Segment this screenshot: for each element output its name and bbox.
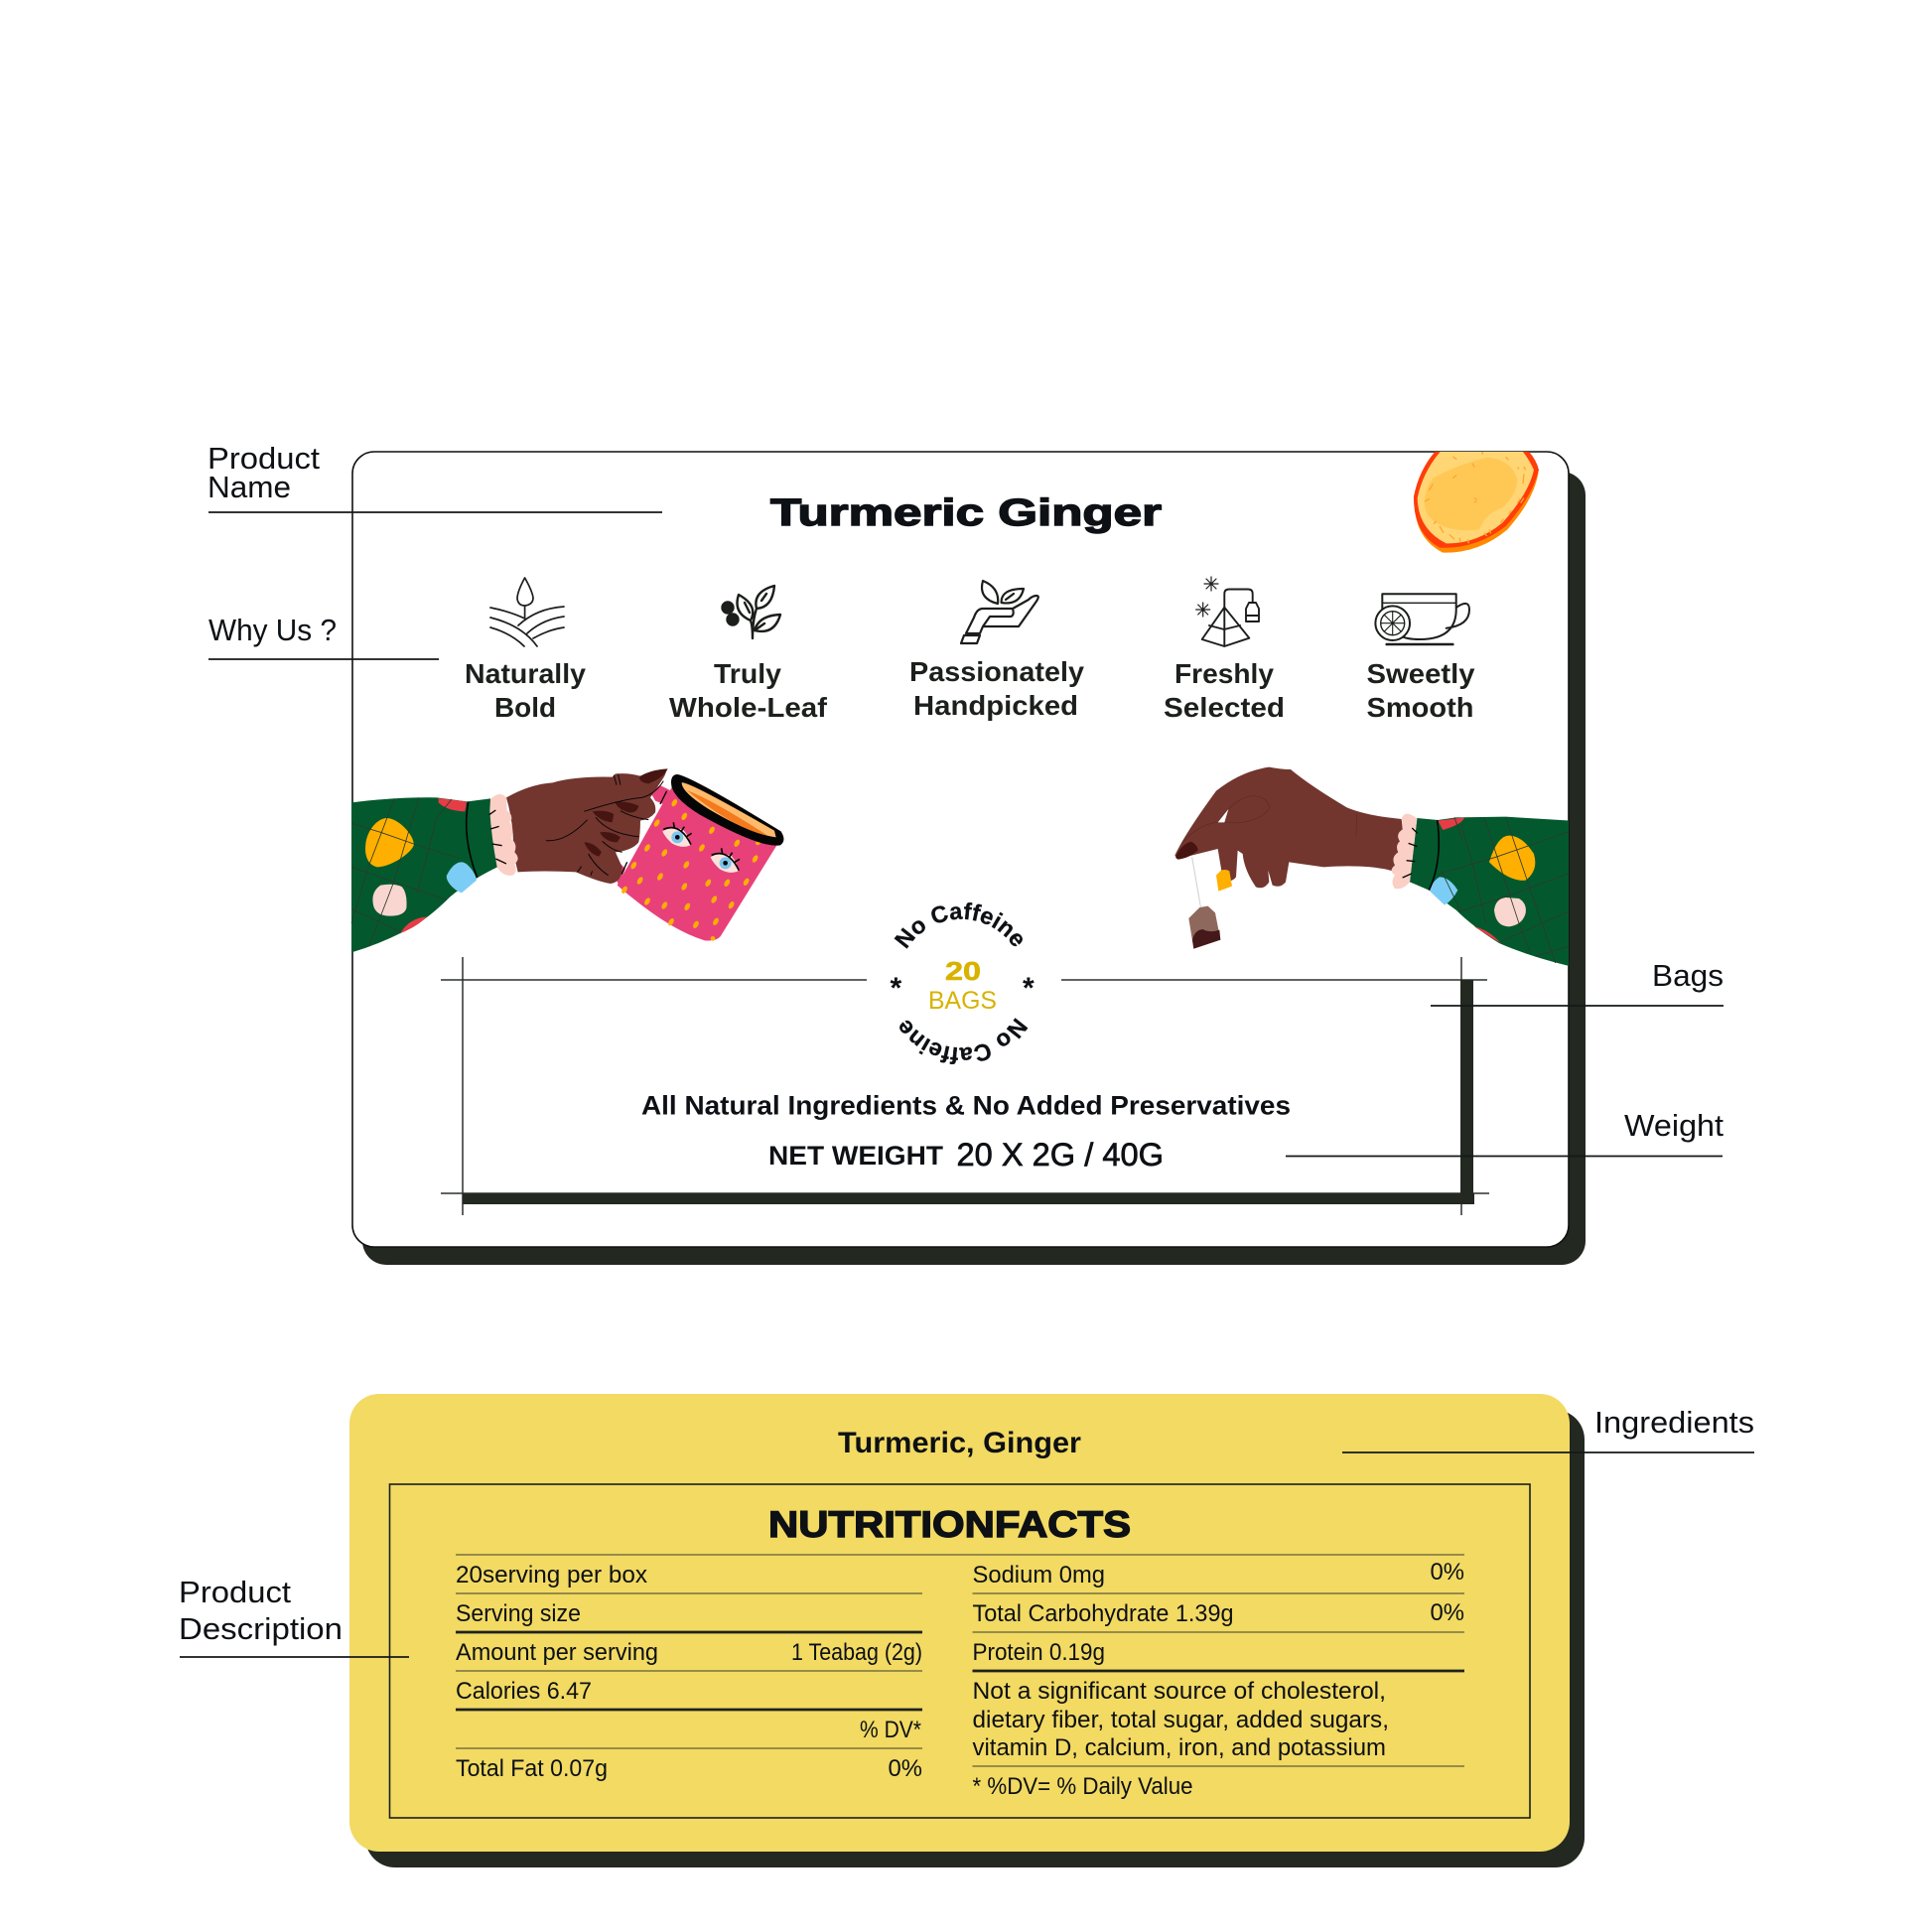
no caffeine badge: BAGS <box>928 987 997 1015</box>
left nutrition column <box>456 1562 922 1782</box>
label: passionately handpicked <box>909 656 1084 721</box>
nutrition card body <box>349 1394 1570 1852</box>
hand <box>1174 767 1403 888</box>
nutrition facts heading: NUTRITIONFACTS <box>768 1504 1131 1545</box>
label: truly whole-leaf: Truly <box>714 658 781 689</box>
left nutrition column: 20serving per box <box>456 1562 647 1588</box>
left nutrition column: Serving size <box>456 1600 581 1627</box>
label: sweetly smooth <box>1366 658 1475 723</box>
title: Turmeric Ginger <box>770 492 1162 534</box>
no caffeine badge <box>890 902 1035 1064</box>
mug handle <box>608 785 670 886</box>
label: passionately handpicked: Passionately <box>909 656 1084 687</box>
callout: bags: Bags <box>1652 958 1724 993</box>
callout: ingredients: Ingredients <box>1594 1405 1754 1440</box>
no caffeine badge: No Caffeine <box>899 1018 1029 1064</box>
tag <box>1216 870 1232 892</box>
cuff frill <box>489 794 518 876</box>
label: truly whole-leaf: Whole-Leaf <box>669 692 828 723</box>
ingredients heading: Turmeric, Ginger <box>838 1427 1081 1459</box>
label: truly whole-leaf <box>669 658 828 723</box>
table rules <box>456 1555 1464 1766</box>
left nutrition column: % DV* <box>860 1717 921 1743</box>
icon: orange slice <box>1414 447 1539 553</box>
label: sweetly smooth: Sweetly <box>1366 658 1475 689</box>
card body <box>352 452 1569 1247</box>
icon: passionately handpicked <box>961 581 1038 643</box>
net weight <box>768 1137 1164 1173</box>
callout: product name <box>207 441 662 512</box>
callout: product name: Product <box>207 441 320 476</box>
right nutrition column: vitamin D, calcium, iron, and potassium <box>973 1734 1386 1761</box>
right nutrition column: 0% <box>1430 1559 1464 1586</box>
panel: front label card <box>351 451 1586 1265</box>
net weight: 20 X 2G / 40G <box>957 1137 1164 1173</box>
mug body <box>618 784 777 940</box>
illustration: right arm with tea bag <box>1174 767 1571 966</box>
claim text: All Natural Ingredients & No Added Preservatives <box>641 1090 1291 1120</box>
label: freshly selected: Selected <box>1164 692 1285 723</box>
label: naturally bold: Naturally <box>465 658 586 689</box>
callout: product description: Description <box>179 1611 343 1646</box>
illustration: left arm with mug <box>351 768 783 952</box>
right nutrition column: Sodium 0mg <box>973 1562 1105 1588</box>
tea bag string <box>1192 857 1200 906</box>
no caffeine badge: * <box>1023 972 1035 1005</box>
mug rim <box>671 774 783 846</box>
left nutrition column: 0% <box>888 1755 922 1782</box>
right nutrition column <box>973 1559 1464 1800</box>
left nutrition column: 1 Teabag (2g) <box>791 1639 922 1666</box>
panel: nutrition card <box>349 1394 1585 1867</box>
label: freshly selected: Freshly <box>1174 658 1274 689</box>
callout: product description <box>179 1575 409 1657</box>
cuff frill <box>1392 814 1417 889</box>
callout: why us: Why Us ? <box>208 613 337 647</box>
right nutrition column: * %DV= % Daily Value <box>973 1773 1193 1800</box>
mug eyes <box>662 822 740 873</box>
no caffeine badge: 20 <box>945 956 981 986</box>
left nutrition column: Total Fat 0.07g <box>456 1755 608 1782</box>
icon: freshly selected <box>1196 577 1259 646</box>
callout: product name: Name <box>207 470 291 504</box>
label: passionately handpicked: Handpicked <box>913 690 1078 721</box>
label: sweetly smooth: Smooth <box>1366 692 1473 723</box>
label: freshly selected <box>1164 658 1285 723</box>
callout: weight: Weight <box>1624 1108 1724 1143</box>
card shadow <box>362 472 1586 1265</box>
icon: sweetly smooth <box>1375 594 1469 644</box>
left nutrition column: Amount per serving <box>456 1639 658 1666</box>
sleeve <box>1410 817 1571 966</box>
right nutrition column: dietary fiber, total sugar, added sugars, <box>973 1707 1389 1733</box>
tea bag <box>1188 906 1220 949</box>
callout: product description: Product <box>179 1575 291 1609</box>
net weight: NET WEIGHT <box>768 1141 944 1171</box>
right nutrition column: Not a significant source of cholesterol, <box>973 1678 1386 1705</box>
no caffeine badge: * <box>890 972 901 1005</box>
nutrition facts box <box>389 1484 1530 1818</box>
right nutrition column: Protein 0.19g <box>973 1639 1105 1666</box>
left nutrition column: Calories 6.47 <box>456 1678 592 1705</box>
icon: naturally bold <box>490 578 564 646</box>
nutrition card shadow <box>365 1410 1585 1867</box>
bottom frame rules <box>441 957 1489 1215</box>
label: naturally bold <box>465 658 586 723</box>
icon: truly whole-leaf <box>723 586 780 638</box>
right nutrition column: 0% <box>1430 1599 1464 1626</box>
label: naturally bold: Bold <box>494 692 556 723</box>
no caffeine badge: No Caffeine <box>894 902 1023 949</box>
sleeve <box>351 797 497 952</box>
hand <box>506 769 666 884</box>
right nutrition column: Total Carbohydrate 1.39g <box>973 1600 1233 1627</box>
